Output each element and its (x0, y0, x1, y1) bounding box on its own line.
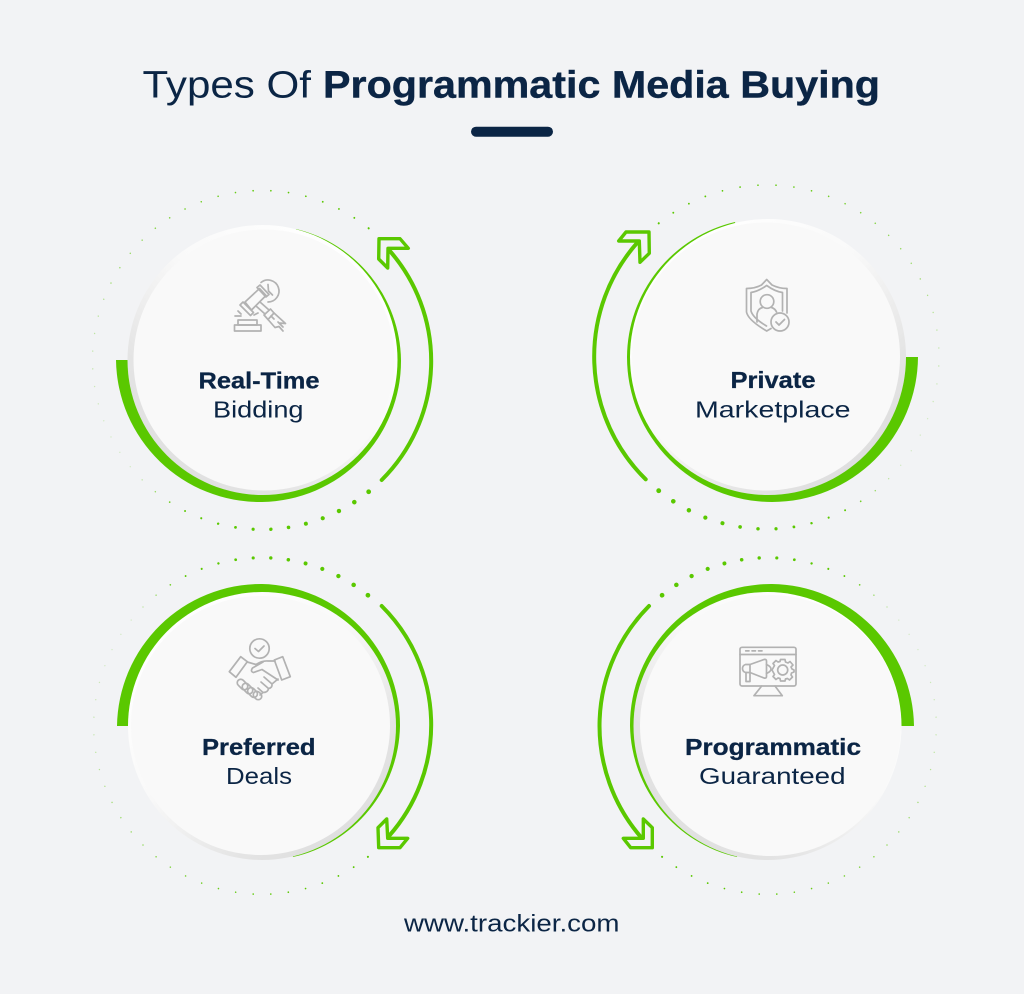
crescent ring (627, 222, 918, 502)
panel: Private Marketplace (594, 184, 940, 531)
curved arrow (378, 606, 431, 848)
label: Private Marketplace (695, 367, 850, 422)
label: Preferred Deals: Preferred (202, 734, 316, 760)
dotted ring (92, 190, 372, 531)
icon: shield with person (746, 280, 789, 331)
label: Programmatic Guaranteed: Guaranteed (699, 763, 846, 789)
dotted ring (659, 556, 937, 895)
label: Real-Time Bidding (198, 367, 320, 422)
dotted ring (93, 556, 371, 895)
label: Programmatic Guaranteed: Programmatic (685, 734, 861, 760)
panel: Real-Time Bidding (92, 190, 431, 531)
panel: Preferred Deals (93, 556, 431, 895)
curved arrow (379, 239, 431, 480)
curved arrow (594, 232, 649, 479)
footer url: www.trackier.com (403, 910, 620, 938)
label: Real-Time Bidding: Real-Time (198, 367, 320, 393)
label: Real-Time Bidding: Bidding (213, 396, 304, 422)
label: Preferred Deals: Deals (226, 763, 292, 789)
label: Private Marketplace: Private (730, 367, 816, 393)
crescent ring (117, 584, 400, 857)
title: Programmatic Media Buying (323, 64, 880, 106)
crescent ring (630, 584, 914, 857)
title (142, 64, 880, 106)
circle card (128, 592, 396, 860)
icon: gavel and clock (234, 280, 286, 331)
title underline bar (471, 127, 553, 137)
circle card (634, 592, 902, 860)
circle card (630, 219, 906, 495)
panel: Programmatic Guaranteed (600, 556, 937, 895)
circle card (128, 225, 398, 495)
label: Preferred Deals (202, 734, 316, 789)
title: Types Of (142, 64, 311, 106)
label: Private Marketplace: Marketplace (695, 396, 850, 422)
crescent ring (116, 229, 401, 502)
dotted ring (655, 184, 940, 531)
label: Programmatic Guaranteed (685, 734, 861, 789)
icon: handshake with check (229, 639, 290, 701)
curved arrow (600, 606, 652, 848)
icon: monitor with megaphone and gear (740, 647, 796, 696)
